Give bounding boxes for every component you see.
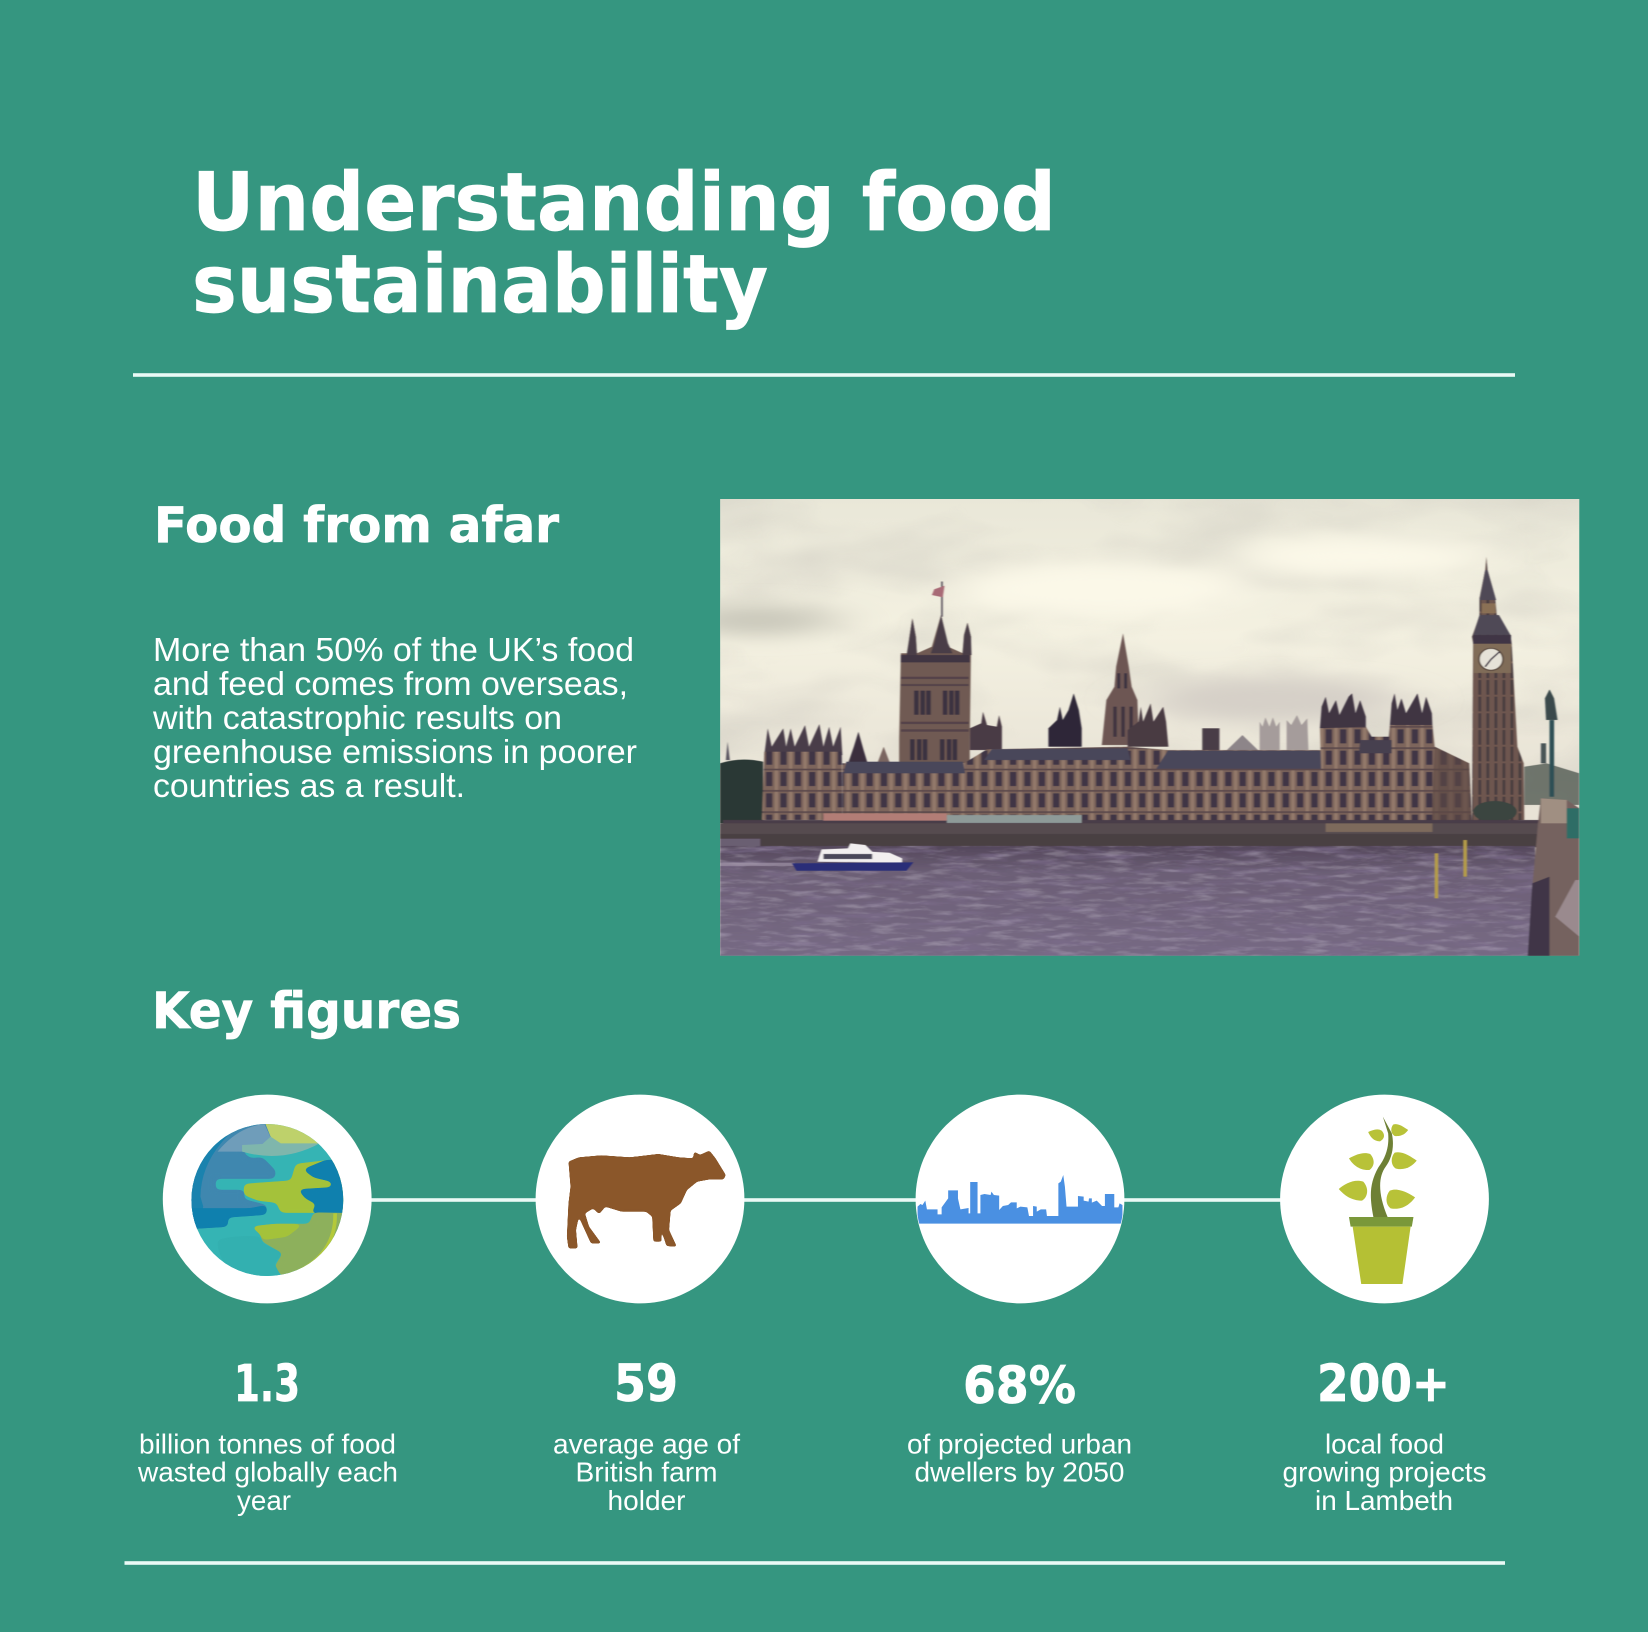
stat: 59: 59 <box>614 1355 678 1414</box>
stat: 1.3: 1.3 <box>234 1355 300 1414</box>
text block: food from afar body: with catastrophic results on <box>152 699 562 736</box>
stat: 200+ <box>1282 1355 1486 1516</box>
title: sustainability <box>192 238 768 331</box>
icon: cow <box>536 1095 744 1303</box>
heading: Key figures: Key figures <box>152 982 461 1040</box>
stat: 59: holder <box>608 1485 686 1516</box>
stat: 200+: 200+ <box>1317 1355 1450 1414</box>
heading: Food from afar: Food from afar <box>154 497 560 554</box>
timeline connector <box>368 1198 1284 1202</box>
text block: food from afar body: and feed comes from overseas, <box>153 665 628 702</box>
title: Understanding food <box>192 156 1056 249</box>
stat: 59 <box>553 1355 740 1516</box>
text block: food from afar body: More than 50% of the UK’s food <box>153 631 634 668</box>
photo: Houses of Parliament and the Thames <box>677 499 1579 956</box>
stat: 59: average age of <box>553 1429 740 1460</box>
stat: 68%: dwellers by 2050 <box>914 1457 1124 1488</box>
stat: 200+: local food <box>1325 1429 1444 1460</box>
stat: 68%: of projected urban <box>907 1429 1132 1460</box>
stat: 200+: growing projects <box>1282 1457 1486 1488</box>
stat: 68%: 68% <box>963 1357 1076 1416</box>
stat: 1.3 <box>137 1355 398 1516</box>
icon: potted plant <box>1280 1095 1489 1303</box>
title <box>192 156 1056 331</box>
stat: 1.3: year <box>237 1485 291 1516</box>
icon: globe <box>163 1095 372 1303</box>
stat: 200+: in Lambeth <box>1315 1485 1453 1516</box>
text block: food from afar body: greenhouse emissions in poorer <box>153 733 637 770</box>
icon: city skyline <box>916 1095 1124 1303</box>
stat: 59: British farm <box>576 1457 718 1488</box>
stat: 1.3: billion tonnes of food <box>139 1429 396 1460</box>
text block: food from afar body <box>152 631 637 804</box>
text block: food from afar body: countries as a result. <box>153 767 465 804</box>
stat: 1.3: wasted globally each <box>137 1457 398 1488</box>
stat: 68% <box>907 1357 1132 1488</box>
